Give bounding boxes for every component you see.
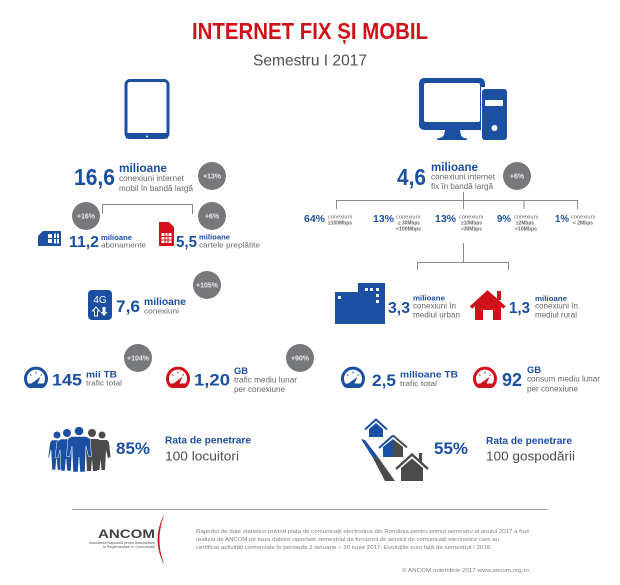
logo: ANCOM xyxy=(89,516,164,563)
icon: blue building xyxy=(335,283,385,324)
stat: fixed total traffic xyxy=(372,370,458,390)
stat: 9% speed tier xyxy=(497,213,538,232)
icon: blue gauge fixed xyxy=(343,368,364,388)
stat: mobile average traffic: 1,20 xyxy=(194,370,230,390)
stat: mobile total traffic: 145 xyxy=(52,370,82,390)
bracket: mobile split xyxy=(102,204,192,214)
stat: 13% speed tier 30-100 xyxy=(373,213,421,232)
stat: mobile total traffic xyxy=(52,370,122,390)
stat: prepaid cards: cartele preplătite xyxy=(199,240,260,250)
stat: subscriptions: milioane xyxy=(101,233,132,242)
stat: mobile average traffic: trafic mediu lunar xyxy=(234,376,297,384)
icon: tablet xyxy=(126,80,168,138)
stat: 9% speed tier: <10Mbps xyxy=(515,226,537,232)
panel: fixed broadband total: 4,6 xyxy=(397,164,426,190)
stat: 13% speed tier 10-30: conexiuni xyxy=(459,214,483,220)
stat: fixed penetration: 55% xyxy=(434,439,468,458)
panel: mobile broadband total: mobil în bandă largă xyxy=(119,184,194,193)
panel: fixed broadband total: conexiuni internet xyxy=(431,172,496,182)
stat: 13% speed tier 30-100: conexiuni xyxy=(396,214,420,220)
stat: urban connections: conexiuni în xyxy=(413,302,456,310)
stat: fixed average consumption: 92 xyxy=(502,370,522,390)
panel: fixed broadband total xyxy=(397,162,496,191)
stat: rural connections: milioane xyxy=(535,294,567,303)
stat: 9% speed tier: ≥2Mbps xyxy=(516,220,534,226)
panel: mobile broadband total: conexiuni internet xyxy=(119,174,185,183)
icon: blue gauge mobile xyxy=(26,368,47,388)
stat: 1% speed tier: < 2Mbps xyxy=(573,220,593,226)
icon: red gauge mobile xyxy=(168,368,188,388)
stat: prepaid cards xyxy=(176,232,260,251)
stat: 13% speed tier 30-100: <100Mbps xyxy=(396,226,421,232)
stat: urban connections: mediul urban xyxy=(413,310,460,320)
stat: fixed total traffic: 2,5 xyxy=(372,371,396,390)
stat: 64% speed tier xyxy=(304,213,352,226)
badge: +6% fixed: +6% xyxy=(510,174,525,180)
subtitle: Semestru I 2017 xyxy=(253,52,367,70)
logo: ANCOM: Autoritatea Națională pentru Administrare xyxy=(89,541,155,545)
icon: group of people xyxy=(48,427,110,472)
badge: +16%: +16% xyxy=(77,214,96,220)
stat: urban connections xyxy=(388,294,460,320)
stat: 64% speed tier: 64% xyxy=(304,213,326,225)
stat: 4G connections: conexiuni xyxy=(144,306,179,316)
icon: desktop computer xyxy=(419,78,509,142)
panel: fixed broadband total: milioane xyxy=(431,162,478,174)
stat: 9% speed tier: 9% xyxy=(497,213,512,225)
stat: fixed average consumption: GB xyxy=(527,365,541,376)
stat: mobile average traffic: GB xyxy=(234,366,248,377)
stat: rural connections: conexiuni în xyxy=(535,302,578,310)
panel: fixed broadband total: fix în bandă largă xyxy=(431,182,494,191)
logo: ANCOM: și Reglementare în Comunicații xyxy=(103,545,155,549)
stat: 13% speed tier 10-30: <30Mbps xyxy=(461,226,482,232)
stat: rural connections: 1,3 xyxy=(509,300,530,317)
badge: +104% xyxy=(124,344,152,372)
panel: mobile broadband total: 16,6 xyxy=(74,164,115,190)
badge: +6% prepaid xyxy=(198,202,226,230)
stat: fixed average consumption: consum mediu lunar xyxy=(527,374,600,384)
stat: 13% speed tier 10-30: 13% xyxy=(435,213,457,225)
stat: 4G connections: 7,6 xyxy=(116,297,140,316)
icon: red gauge fixed xyxy=(474,368,496,388)
stat: fixed penetration: Rata de penetrare xyxy=(486,436,572,447)
icon: 4G: 4G xyxy=(93,295,107,306)
footer credit: © ANCOM noiembrie 2017 www.ancom.org.ro xyxy=(402,567,529,574)
stat: rural connections xyxy=(509,294,578,320)
stat: mobile penetration xyxy=(116,436,251,464)
text block: report note: realizat de ANCOM pe baza datelor raportate semestrial de furnizorii de servicii de comunicații electronice care au xyxy=(196,537,499,543)
badge: +6% prepaid: +6% xyxy=(205,214,220,220)
badge: +90% xyxy=(286,344,314,372)
text block: report note: Raportul de date statistice privind piața de comunicații electronice din România pentru primul semestru al anului 2017 a fost xyxy=(196,529,530,535)
stat: 4G connections: milioane xyxy=(144,297,186,308)
stat: 13% speed tier 30-100: ≥ 30Mbps xyxy=(398,220,420,226)
stat: fixed penetration: 100 gospodării xyxy=(486,450,575,464)
stat: 1% speed tier xyxy=(555,213,595,226)
stat: 9% speed tier: conexiuni xyxy=(514,214,538,220)
stat: fixed total traffic: milioane TB xyxy=(400,370,458,380)
tree connector: speed tiers xyxy=(336,192,578,209)
stat: rural connections: mediul rural xyxy=(535,310,577,320)
stat: urban connections: milioane xyxy=(413,294,445,302)
badge: +104%: +104% xyxy=(127,356,150,362)
stat: mobile penetration: 85% xyxy=(116,439,150,458)
badge: +90%: +90% xyxy=(291,356,310,362)
stat: 64% speed tier: ≥100Mbps xyxy=(328,220,352,226)
badge: +105%: +105% xyxy=(196,282,219,290)
stat: mobile penetration: Rata de penetrare xyxy=(165,436,251,446)
stat: fixed average consumption xyxy=(502,365,600,394)
stat: 4G connections xyxy=(116,297,186,316)
badge: +13%: +13% xyxy=(203,174,222,180)
stat: prepaid cards: 5,5 xyxy=(176,234,197,251)
icon: blue SIM card xyxy=(38,231,61,246)
stat: fixed penetration xyxy=(434,436,575,464)
badge: +105% xyxy=(193,271,221,299)
icon: red house xyxy=(471,291,504,320)
stat: 13% speed tier 30-100: 13% xyxy=(373,213,395,225)
stat: mobile total traffic: mii TB xyxy=(86,370,117,380)
stat: 13% speed tier 10-30: ≥10Mbps xyxy=(461,220,482,226)
badge: +6% fixed xyxy=(503,162,531,190)
icon: 4G xyxy=(88,290,112,320)
badge: +16% xyxy=(72,202,100,230)
stat: 64% speed tier: conexiuni xyxy=(328,214,352,220)
stat: 1% speed tier: 1% xyxy=(555,213,570,225)
tree connector: urban and rural xyxy=(418,243,508,270)
stat: fixed average consumption: per conexiune xyxy=(527,384,579,394)
icon: houses with wedge xyxy=(361,420,428,481)
badge: +13% xyxy=(198,162,226,190)
title: INTERNET FIX ȘI MOBIL xyxy=(192,18,428,45)
icon: red SIM card xyxy=(159,222,174,246)
stat: subscriptions: abonamente xyxy=(101,240,146,250)
panel: mobile broadband total: milioane xyxy=(119,163,167,175)
stat: prepaid cards: milioane xyxy=(199,232,230,242)
stat: fixed total traffic: trafic total xyxy=(400,379,437,388)
text block: report note: certificat activități comerciale în perioada 1 ianuarie – 30 iunie 2017. Evoluțiile sunt față de semestrul I 2016. xyxy=(196,545,492,551)
stat: subscriptions xyxy=(69,233,146,251)
panel: mobile broadband total xyxy=(74,163,194,193)
stat: 1% speed tier: conexiuni xyxy=(571,214,595,220)
text block: report note xyxy=(196,529,530,551)
stat: subscriptions: 11,2 xyxy=(69,234,99,251)
stat: 13% speed tier 10-30 xyxy=(435,213,483,232)
stat: urban connections: 3,3 xyxy=(388,300,410,317)
stat: mobile total traffic: trafic total xyxy=(86,378,122,388)
logo: ANCOM: ANCOM xyxy=(98,529,155,541)
stat: mobile average traffic: per conexiune xyxy=(234,385,286,394)
stat: mobile penetration: 100 locuitori xyxy=(165,450,239,464)
stat: mobile average traffic xyxy=(194,366,297,394)
